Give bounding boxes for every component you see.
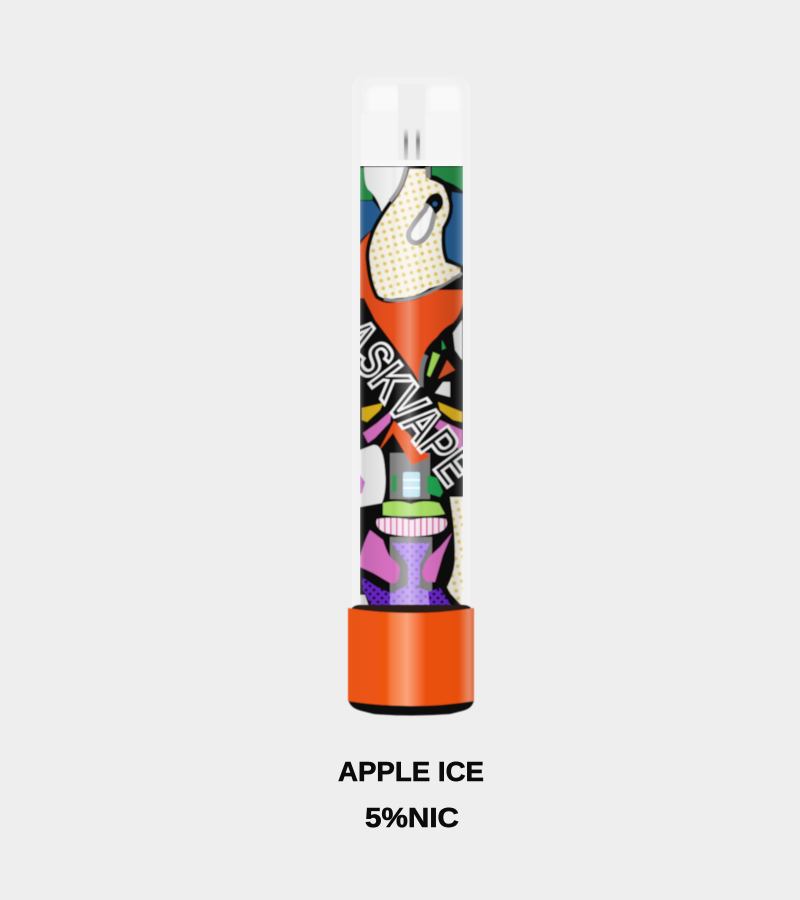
printed wrap artwork (360, 166, 463, 606)
grey central band (390, 453, 430, 499)
orange body (360, 225, 463, 387)
wrap cylinder sheen (360, 166, 463, 612)
outer transparent sleeve (352, 76, 470, 616)
nicotine strength: 5%NIC (365, 802, 459, 833)
flavour name: APPLE ICE (338, 756, 484, 787)
logo lettering: ASKVAPE (324, 308, 487, 496)
mouthpiece cap (361, 77, 462, 167)
orange base (348, 605, 474, 716)
caption (338, 756, 484, 833)
upper artwork: blobs on top half (360, 167, 463, 387)
infographic canvas (338, 87, 484, 828)
lower artwork: lips, tongues, purple shapes (360, 497, 463, 612)
middle artwork: accents around logo (360, 320, 462, 507)
device: disposable vape (347, 87, 475, 716)
